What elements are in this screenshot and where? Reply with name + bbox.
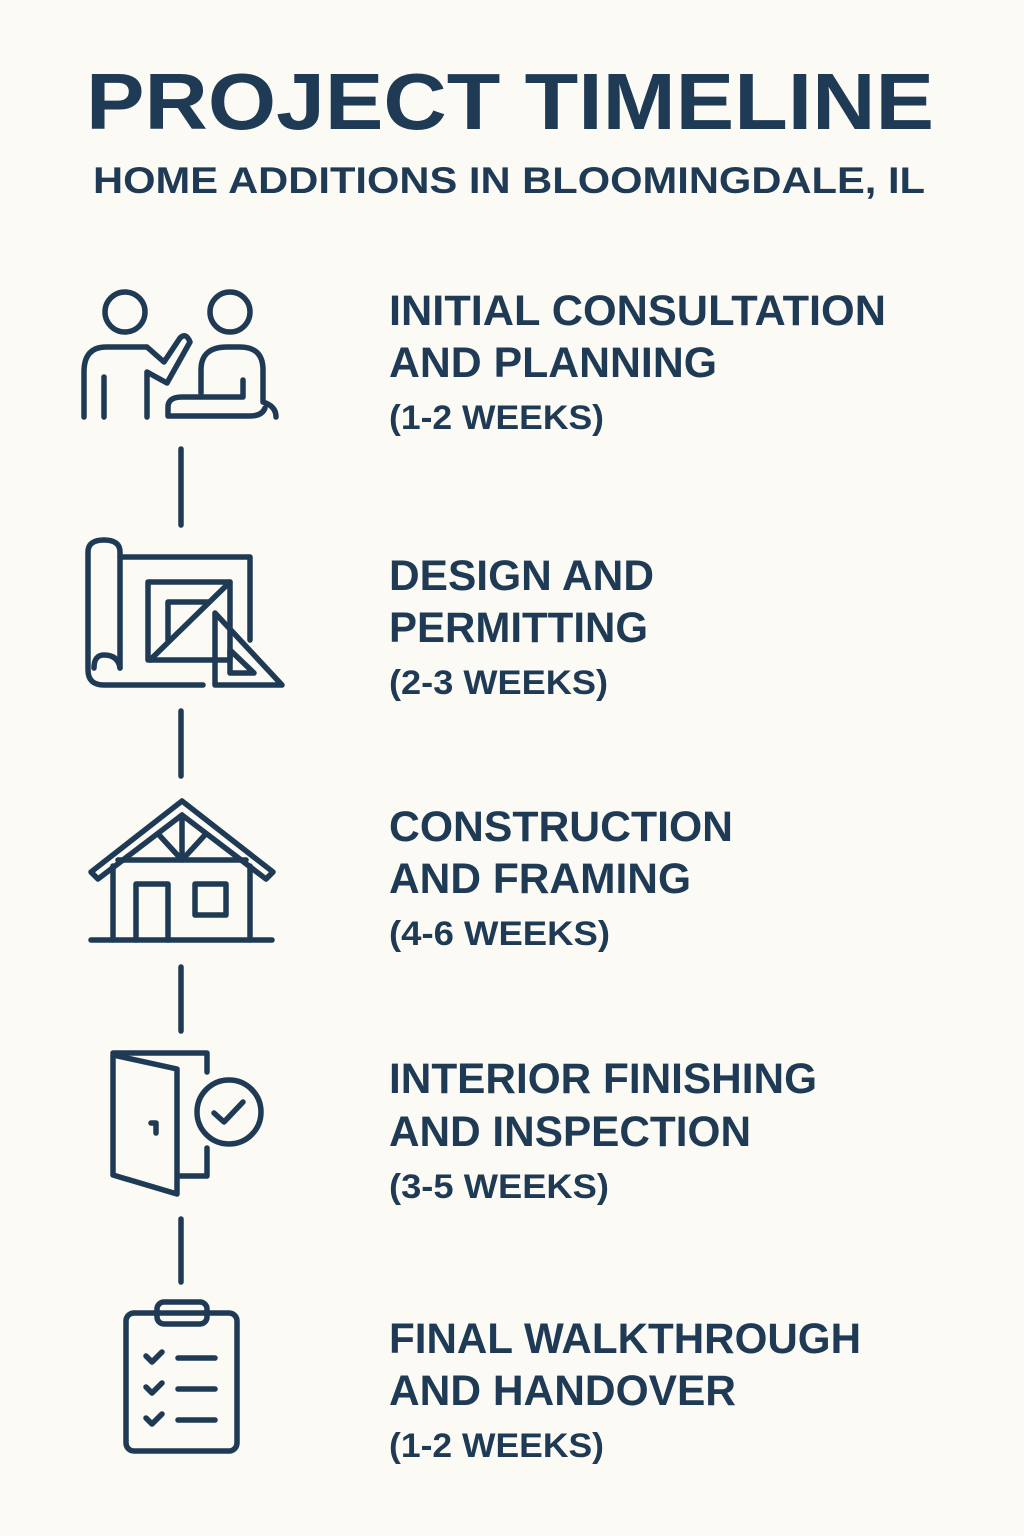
- icon: house frame: [91, 801, 273, 940]
- step 2 text: DESIGN AND: [389, 552, 654, 600]
- icon: clipboard checklist: [126, 1302, 237, 1451]
- step 5 text: (1-2 WEEKS): [389, 1427, 604, 1465]
- step 1 text: INITIAL CONSULTATION: [389, 287, 886, 335]
- step 3 text: [389, 803, 733, 953]
- step 4 text: AND INSPECTION: [389, 1108, 751, 1156]
- title: PROJECT TIMELINE: [86, 57, 934, 146]
- step 3 text: (4-6 WEEKS): [389, 915, 610, 953]
- connector 2: [178, 711, 184, 776]
- icon: consultation people: [84, 292, 276, 417]
- connector 1: [178, 449, 184, 525]
- step 5 text: [389, 1315, 861, 1465]
- step 1 text: [389, 287, 886, 437]
- step 2 text: [389, 552, 654, 702]
- subtitle: HOME ADDITIONS IN BLOOMINGDALE, IL: [93, 160, 925, 201]
- step 3 text: AND FRAMING: [389, 855, 691, 903]
- step 3 text: CONSTRUCTION: [389, 803, 733, 851]
- connector 4: [178, 1219, 184, 1282]
- step 5 text: FINAL WALKTHROUGH: [389, 1315, 861, 1363]
- step 2 text: (2-3 WEEKS): [389, 664, 608, 702]
- step 2 text: PERMITTING: [389, 604, 648, 652]
- connector 3: [178, 967, 184, 1031]
- icon: door with check: [113, 1053, 261, 1194]
- step 5 text: AND HANDOVER: [389, 1367, 736, 1415]
- step 4 text: (3-5 WEEKS): [389, 1168, 609, 1206]
- step 1 text: (1-2 WEEKS): [389, 399, 604, 437]
- step 1 text: AND PLANNING: [389, 339, 717, 387]
- step 4 text: [389, 1055, 817, 1206]
- icon: blueprint and triangle: [88, 540, 282, 685]
- step 4 text: INTERIOR FINISHING: [389, 1055, 817, 1103]
